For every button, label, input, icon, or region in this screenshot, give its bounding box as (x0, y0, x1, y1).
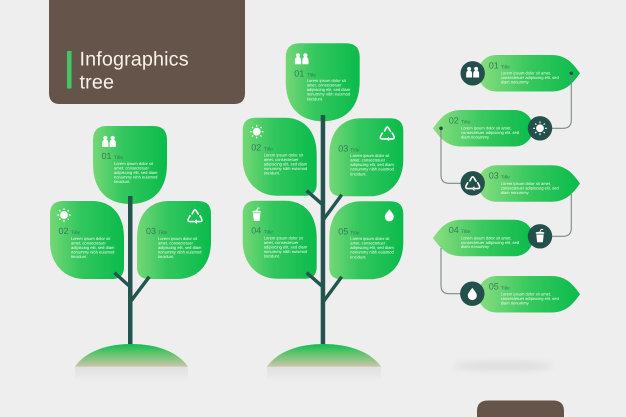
title: tree (80, 71, 114, 93)
leaf 03 body: nonummy nibh euismod (158, 249, 202, 254)
leaf 02 title: Title (264, 147, 273, 153)
leaf 04 body: nonummy nibh euismod (264, 249, 308, 254)
leaf 03 (137, 201, 211, 279)
pill 03 body: diam nonummy (501, 190, 530, 195)
pill 01 title: Title (501, 64, 510, 70)
pill 01 (478, 55, 580, 92)
leaf 03 label: 03 (146, 226, 156, 236)
pill 04 body: consectetuer adipiscing elit, sed (461, 240, 520, 245)
leaf 03 body: nonummy nibh euismod (350, 167, 394, 172)
leaf 01 body: adipiscing elit, sed diam (307, 87, 351, 92)
pill 03 body: Lorem ipsum dolor sit amet, (501, 181, 551, 186)
leaf 02 body: Lorem ipsum dolor sit (71, 236, 111, 241)
leaf 02 (50, 201, 124, 279)
leaf 03 body: Lorem ipsum dolor sit (158, 236, 198, 241)
leaf 01 body: tincidunt. (307, 96, 323, 101)
leaf 04 (243, 201, 317, 279)
leaf 05 (329, 201, 403, 279)
pill 04 body: diam nonummy (461, 244, 490, 249)
leaf 02 body: amet, consectetuer (71, 240, 106, 245)
connectors (441, 73, 571, 294)
shadow (453, 362, 553, 370)
icon badge: water drop (460, 282, 484, 306)
leaf 01 (286, 43, 360, 121)
leaf 01 body: Lorem ipsum dolor sit (307, 78, 347, 83)
leaf 01 body: tincidunt. (114, 179, 130, 184)
pill 04 body: Lorem ipsum dolor sit amet, (461, 235, 512, 240)
pill 03 title: Title (501, 175, 510, 181)
title panel (49, 0, 245, 104)
pill 01 body: diam nonummy (501, 80, 530, 84)
leaf 05 body: Lorem ipsum dolor sit (350, 236, 390, 241)
tree 1 trunk and branches (114, 196, 149, 344)
leaf 04 body: tincidunt. (264, 254, 280, 259)
leaf 05 body: nonummy nibh euismod (350, 250, 394, 255)
pill 05 body: Lorem ipsum dolor sit amet, (501, 292, 551, 297)
flow diagram (433, 55, 580, 370)
pill 01 body: consectetuer adipiscing elit, sed (501, 75, 559, 80)
pill 01 label: 01 (489, 60, 499, 70)
leaf 01 body: amet, consectetuer (114, 165, 149, 170)
leaf 01 (93, 126, 167, 204)
tree 2 ground (267, 344, 381, 382)
leaf 01 body: nonummy nibh euismod (114, 174, 158, 179)
leaf 05 body: tincidunt. (350, 254, 367, 259)
icon: water drop (385, 209, 394, 221)
leaf 05 body: amet, consectetuer (350, 241, 386, 246)
tree 2: five leaves (243, 43, 403, 382)
leaf 03 body: adipiscing elit, sed diam (350, 162, 394, 167)
leaf 05 body: adipiscing elit, sed diam (350, 245, 394, 250)
leaf 03 (329, 118, 403, 196)
tree 1 ground (75, 344, 188, 382)
leaf 02 body: tincidunt. (264, 171, 280, 176)
leaf 04 label: 04 (251, 226, 261, 236)
leaf 02 label: 02 (58, 226, 69, 236)
pill 05 body: consectetuer adipiscing elit, sed (501, 296, 559, 301)
icon: cup (252, 208, 261, 221)
icon badge: cup (528, 224, 552, 248)
icon: sun (57, 208, 71, 222)
pill 05 (478, 276, 580, 312)
leaf 02 body: Lorem ipsum dolor sit (264, 152, 304, 157)
leaf 04 body: amet, consectetuer (264, 240, 299, 245)
pill 03 (478, 165, 580, 202)
leaf 01 body: amet, consectetuer (307, 83, 342, 88)
leaf 03 title: Title (350, 147, 360, 153)
leaf 02 body: adipiscing elit, sed diam (71, 245, 115, 250)
leaf 01 body: Lorem ipsum dolor sit (114, 161, 154, 166)
tree 1: three leaves (50, 126, 211, 382)
leaf 05 label: 05 (338, 226, 348, 236)
leaf 01 label: 01 (102, 151, 112, 161)
pill 02 label: 02 (449, 115, 459, 125)
pill 02 body: consectetuer adipiscing elit, sed (461, 130, 520, 135)
icon: sun (250, 125, 264, 138)
leaf 01 body: adipiscing elit, sed diam (114, 170, 158, 175)
icon: people (295, 53, 308, 64)
icon badge: people (460, 61, 485, 86)
leaf 01 title: Title (307, 72, 316, 78)
icon: people (102, 136, 116, 147)
leaf 03 title: Title (158, 230, 167, 236)
leaf 03 label: 03 (338, 143, 348, 153)
leaf 04 title: Title (264, 230, 273, 236)
pill 02 body: Lorem ipsum dolor sit amet, (461, 126, 512, 131)
leaf 02 title: Title (71, 230, 80, 236)
pill 05 body: diam nonummy (501, 300, 530, 306)
leaf 03 body: Lorem ipsum dolor sit (350, 153, 390, 158)
icon: recycle (188, 210, 202, 223)
pill 04 (433, 220, 533, 256)
leaf 04 body: adipiscing elit, sed diam (264, 245, 308, 250)
icon badge: sun (528, 116, 552, 140)
leaf 01 label: 01 (294, 68, 304, 78)
pill 02 (433, 110, 533, 146)
leaf 03 body: amet, consectetuer (158, 240, 193, 245)
leaf 02 (243, 118, 317, 196)
tree 2 trunk and branches (307, 115, 342, 344)
pill 05 title: Title (501, 285, 510, 291)
leaf 02 body: adipiscing elit, sed diam (264, 162, 308, 167)
pill 05 label: 05 (489, 281, 499, 291)
leaf 02 body: nonummy nibh euismod (264, 166, 308, 171)
leaf 02 body: nonummy nibh euismod (71, 249, 115, 254)
leaf 03 body: amet, consectetuer (350, 158, 386, 163)
leaf 03 body: tincidunt. (158, 254, 174, 259)
leaf 02 body: amet, consectetuer (264, 157, 299, 162)
title: Infographics (80, 48, 189, 70)
leaf 01 title: Title (114, 155, 123, 161)
pill 02 title: Title (461, 119, 470, 125)
leaf 02 label: 02 (251, 143, 261, 153)
title accent bar (67, 51, 72, 88)
leaf 02 body: tincidunt. (71, 254, 87, 259)
leaf 03 body: adipiscing elit, sed diam (158, 245, 202, 250)
pill 04 label: 04 (449, 225, 459, 235)
pill 03 label: 03 (489, 171, 499, 181)
leaf 04 body: Lorem ipsum dolor sit (264, 235, 304, 240)
icon badge: recycle (460, 171, 485, 196)
connector dots (439, 72, 573, 130)
bottom brown tab (477, 400, 564, 417)
icon: recycle (380, 127, 394, 140)
leaf 05 title: Title (350, 230, 360, 236)
pill 02 body: diam nonummy (461, 134, 490, 140)
leaf 01 body: nonummy nibh euismod (307, 92, 351, 97)
pill 03 body: consectetuer adipiscing elit, sed (501, 185, 559, 190)
leaf 03 body: tincidunt. (350, 171, 367, 176)
pill 01 body: Lorem ipsum dolor sit amet, (501, 71, 551, 76)
pill 04 title: Title (461, 229, 470, 235)
